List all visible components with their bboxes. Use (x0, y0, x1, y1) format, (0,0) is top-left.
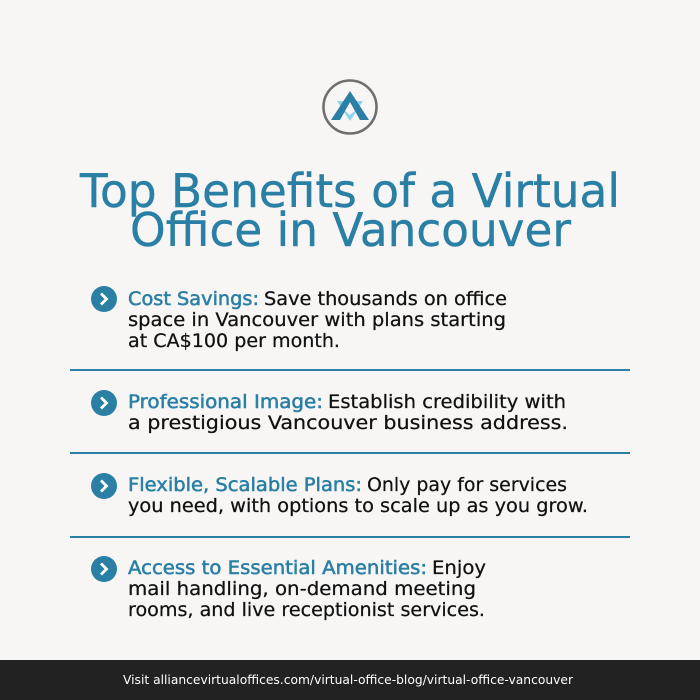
text: cost savings: Cost Savings: (128, 288, 259, 310)
text: professional image (128, 391, 568, 434)
benefit: professional image (91, 390, 568, 434)
icon: chevron bullet (91, 556, 117, 582)
icon: chevron bullet (91, 473, 117, 499)
text: cost savings: at CA$100 per month. (128, 330, 340, 352)
footer bar (0, 660, 700, 700)
text: cost savings: space in Vancouver with plans starting (128, 309, 506, 331)
text: professional image: a prestigious Vancouver business address. (128, 412, 568, 434)
title (79, 164, 620, 257)
footer bar: Visit alliancevirtualoffices.com/virtual-office-blog/virtual-office-vancouver (123, 673, 573, 687)
title: Top Benefits of a Virtual (79, 164, 620, 218)
text: essential amenities (128, 557, 486, 621)
text: cost savings: Save thousands on office (264, 288, 507, 310)
text: flexible plans: you need, with options to scale up as you grow. (128, 495, 588, 517)
text: flexible plans: Only pay for services (367, 474, 567, 496)
text: essential amenities: rooms, and live receptionist services. (128, 599, 485, 621)
text: essential amenities: Access to Essential Amenities: (128, 557, 427, 579)
text: flexible plans (128, 474, 588, 517)
text: professional image: Professional Image: (128, 391, 323, 413)
icon: chevron bullet (91, 390, 117, 416)
text: cost savings (128, 288, 507, 352)
title: Office in Vancouver (130, 203, 571, 257)
text: professional image: Establish credibility with (328, 391, 566, 413)
icon: company logo (324, 80, 376, 134)
text: essential amenities: Enjoy (432, 557, 486, 579)
benefit: essential amenities (91, 556, 486, 621)
text: flexible plans: Flexible, Scalable Plans: (128, 474, 362, 496)
benefit: flexible plans (91, 473, 588, 517)
text: essential amenities: mail handling, on-demand meeting (128, 578, 476, 600)
icon: chevron bullet (91, 286, 117, 312)
benefit: cost savings (91, 286, 507, 352)
